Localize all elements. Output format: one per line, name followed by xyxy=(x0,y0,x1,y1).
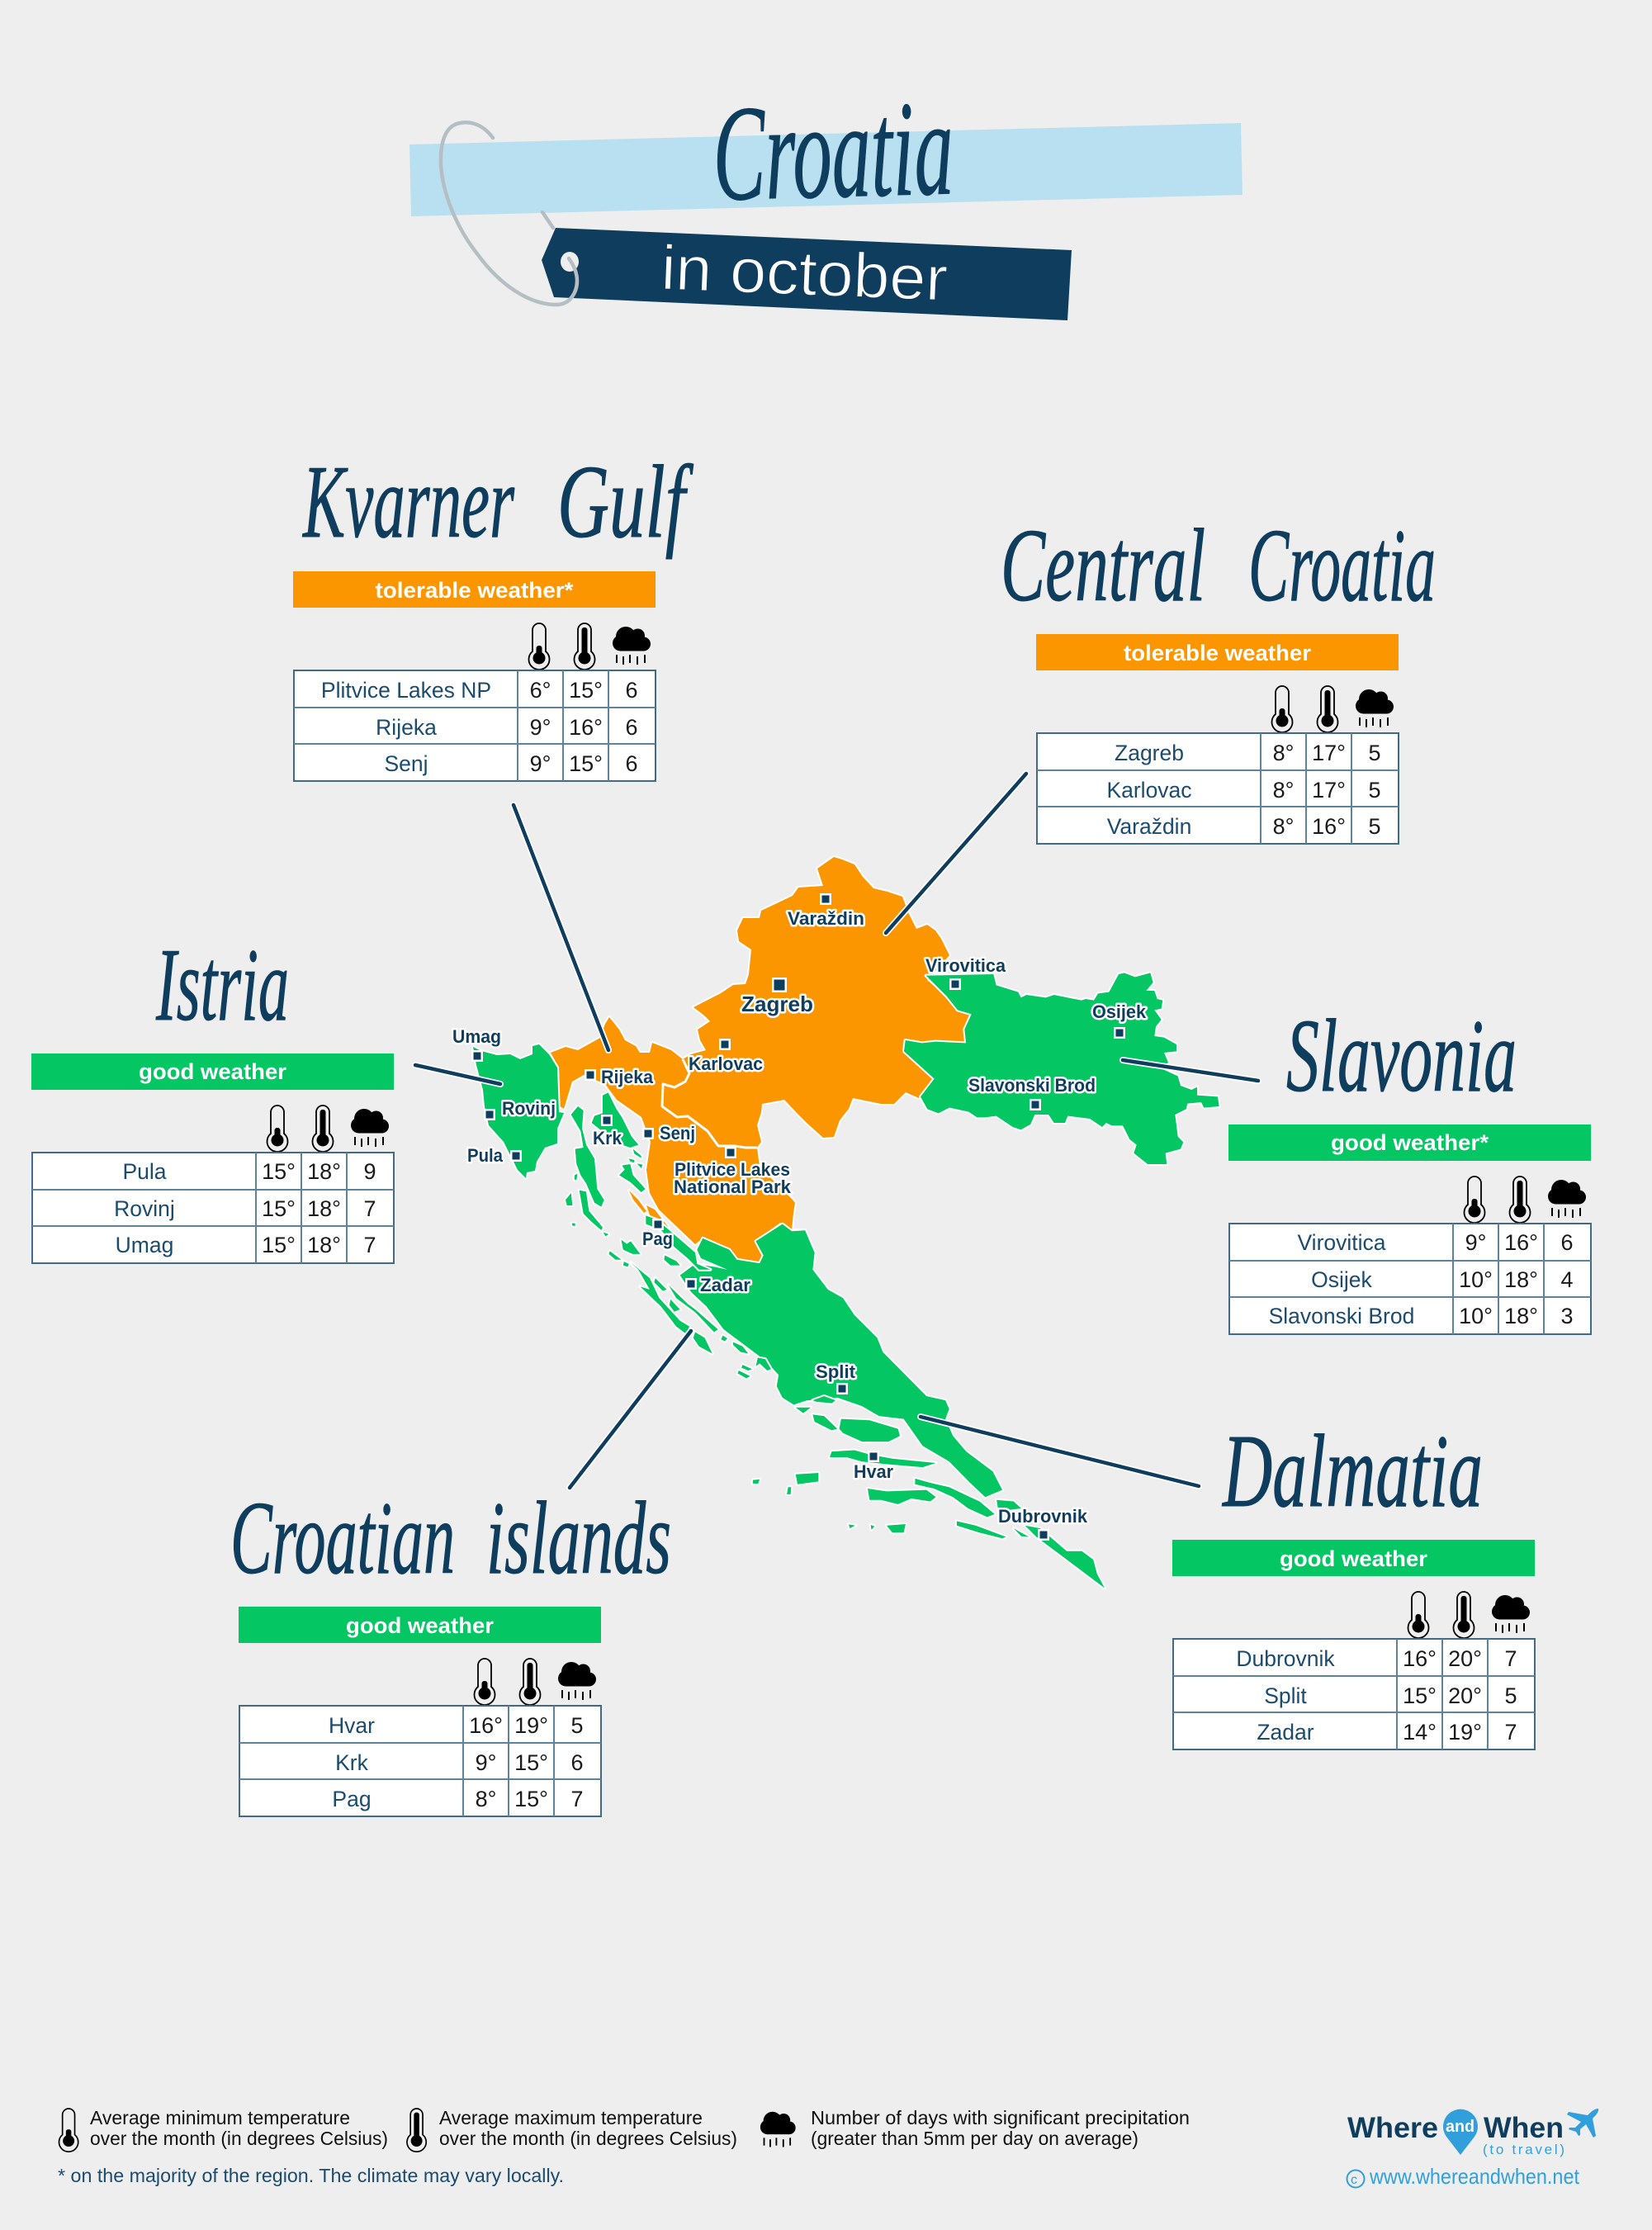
table: Dalmatia: 7 xyxy=(1504,1720,1517,1745)
leader: Central Croatia xyxy=(886,774,1026,933)
table: Slavonia: 10° xyxy=(1459,1267,1493,1292)
northern Adriatic islands xyxy=(566,1092,646,1236)
table: Istria: 15° xyxy=(262,1196,296,1221)
table: Dalmatia: 15° xyxy=(1403,1683,1437,1708)
legend text: minimum temperature xyxy=(90,2107,388,2149)
icon: airplane xyxy=(1567,2109,1598,2138)
map labels: Zadar xyxy=(700,1275,750,1295)
table: Kvarner Gulf: 6 xyxy=(625,715,638,740)
table: Central Croatia xyxy=(1036,634,1399,844)
legend text: precipitation: (greater than 5mm per day on average) xyxy=(811,2128,1138,2149)
table: Central Croatia: Varaždin xyxy=(1107,814,1191,839)
table: Kvarner Gulf: 6 xyxy=(625,678,638,703)
footnote: * on the majority of the region. The climate may vary locally. xyxy=(58,2165,564,2186)
heading: Central Croatia: Croatia xyxy=(1248,509,1436,623)
logo: Where and When xyxy=(1347,2109,1598,2189)
city markers xyxy=(474,895,1123,1539)
table: Dalmatia: 19° xyxy=(1448,1720,1482,1745)
map labels: Zagreb xyxy=(741,992,813,1016)
map labels: National Park xyxy=(674,1177,792,1197)
legend text: maximum temperature xyxy=(439,2107,737,2149)
region: Istria (green) xyxy=(473,1044,564,1178)
table: Slavonia: 3 xyxy=(1560,1304,1574,1328)
table: Croatian islands: 15° xyxy=(514,1787,548,1811)
table: Slavonia: 10° xyxy=(1459,1304,1493,1328)
boundary: Kvarner / Central Croatia xyxy=(662,1059,757,1148)
logo pin xyxy=(1443,2109,1478,2155)
table: Dalmatia: 20° xyxy=(1448,1683,1482,1708)
table: Kvarner Gulf: 6 xyxy=(625,751,638,776)
region: Central Croatia and Kvarner (orange) xyxy=(551,857,972,1263)
table: Dalmatia xyxy=(1172,1540,1535,1749)
legend text: minimum temperature: over the month (in degrees Celsius) xyxy=(90,2128,388,2149)
heading: Slavonia: Slavonia xyxy=(1286,999,1517,1114)
map labels: Varaždin xyxy=(788,908,864,929)
icon: maximum temperature xyxy=(407,2109,426,2152)
heading: Kvarner Gulf: Gulf xyxy=(557,445,693,560)
table: Slavonia xyxy=(1228,1124,1591,1334)
map labels: Krk xyxy=(593,1128,622,1148)
table: Kvarner Gulf: tolerable weather* xyxy=(375,578,574,603)
legend text: precipitation: Number of days with significant precipitation xyxy=(811,2107,1190,2128)
table: Dalmatia: 16° xyxy=(1403,1646,1437,1671)
table: Croatian islands: 8° xyxy=(476,1787,496,1811)
table: Dalmatia: 20° xyxy=(1448,1646,1482,1671)
table: Istria: 15° xyxy=(262,1233,296,1257)
table: Istria xyxy=(31,1053,394,1263)
table: Slavonia: Slavonski Brod xyxy=(1269,1304,1414,1328)
leader: Slavonia xyxy=(1123,1060,1258,1081)
table: Central Croatia: Karlovac xyxy=(1106,778,1192,803)
logo tagline: (to travel) xyxy=(1483,2142,1564,2157)
table: Croatian islands: 9° xyxy=(476,1750,496,1775)
heading: Dalmatia: Dalmatia xyxy=(1222,1414,1483,1529)
map labels: Karlovac xyxy=(689,1053,763,1074)
table: Dalmatia: Dubrovnik xyxy=(1236,1646,1335,1671)
region: Dalmatia and southern islands (green) xyxy=(608,1215,1105,1588)
table: Croatian islands: 5 xyxy=(570,1713,584,1738)
icon: precipitation xyxy=(760,2112,796,2147)
price tag xyxy=(542,228,1072,320)
table: Dalmatia: 7 xyxy=(1504,1646,1517,1671)
table: Kvarner Gulf: 15° xyxy=(569,751,603,776)
table: Croatian islands: 15° xyxy=(514,1750,548,1775)
table: Slavonia: 4 xyxy=(1560,1267,1574,1292)
map labels: Slavonski Brod xyxy=(968,1075,1096,1096)
panel: Kvarner Gulf xyxy=(293,445,693,781)
region: Slavonia (green) xyxy=(904,973,1219,1164)
panel: Dalmatia xyxy=(1172,1414,1535,1749)
table: Croatian islands: Hvar xyxy=(329,1713,375,1738)
table: Istria: 18° xyxy=(307,1196,341,1221)
legend text: maximum temperature: Average maximum temperature xyxy=(439,2107,703,2128)
table: Istria: Rovinj xyxy=(114,1196,175,1221)
table: Slavonia: 16° xyxy=(1504,1230,1538,1255)
table: Kvarner Gulf: 9° xyxy=(530,715,551,740)
logo wordmark: When xyxy=(1484,2112,1564,2144)
table: Kvarner Gulf: 9° xyxy=(530,751,551,776)
panel: Croatian islands xyxy=(230,1481,671,1816)
logo wordmark xyxy=(1347,2112,1564,2144)
table: Croatian islands: 6 xyxy=(570,1750,584,1775)
panel: Central Croatia xyxy=(1001,509,1436,844)
map labels: Split xyxy=(816,1361,856,1382)
logo wordmark: Where xyxy=(1347,2112,1438,2144)
table: Central Croatia: 17° xyxy=(1312,778,1346,803)
table: Dalmatia: Zadar xyxy=(1257,1720,1314,1745)
copyright and website: www.whereandwhen.net xyxy=(1369,2164,1580,2189)
map labels: Umag xyxy=(452,1026,501,1047)
table: Central Croatia: 5 xyxy=(1368,741,1381,765)
table: Istria: 18° xyxy=(307,1233,341,1257)
tag hole xyxy=(561,252,579,272)
heading: Kvarner Gulf: Kvarner xyxy=(302,445,515,560)
table: Slavonia: 18° xyxy=(1504,1304,1538,1328)
table: Istria: 18° xyxy=(307,1159,341,1184)
table: Central Croatia: 8° xyxy=(1273,778,1294,803)
table: Dalmatia: 14° xyxy=(1403,1720,1437,1745)
map labels: Pag xyxy=(642,1229,673,1249)
map labels: Hvar xyxy=(854,1461,893,1482)
logo pin text: and xyxy=(1446,2118,1474,2136)
table: Croatian islands: good weather xyxy=(346,1613,494,1638)
table: Croatian islands: Krk xyxy=(335,1750,369,1775)
table: Croatian islands: 16° xyxy=(469,1713,503,1738)
table: Central Croatia: 17° xyxy=(1312,741,1346,765)
table: Kvarner Gulf: Senj xyxy=(384,751,428,776)
map of Croatia xyxy=(473,857,1219,1588)
table: Kvarner Gulf: Plitvice Lakes NP xyxy=(321,678,491,703)
table: Istria: Umag xyxy=(116,1233,173,1257)
table: Istria: Pula xyxy=(122,1159,167,1184)
table: Kvarner Gulf xyxy=(293,571,656,781)
map labels: Rijeka xyxy=(601,1067,654,1087)
table: Dalmatia: Split xyxy=(1264,1683,1307,1708)
map labels: Plitvice Lakes xyxy=(675,1159,790,1180)
table: Croatian islands: 7 xyxy=(570,1787,584,1811)
table: Slavonia: 9° xyxy=(1465,1230,1486,1255)
copyright and website: c xyxy=(1351,2173,1357,2187)
leader: Croatian islands xyxy=(570,1331,691,1488)
legend text: minimum temperature: Average minimum temperature xyxy=(90,2107,350,2128)
table: Istria: 9 xyxy=(363,1159,376,1184)
table: Central Croatia: 5 xyxy=(1368,814,1381,839)
table: Kvarner Gulf: 16° xyxy=(569,715,603,740)
table: Kvarner Gulf: 15° xyxy=(569,678,603,703)
map labels: Osijek xyxy=(1092,1001,1147,1022)
table: Slavonia: 6 xyxy=(1560,1230,1574,1255)
table: Istria: 15° xyxy=(262,1159,296,1184)
heading: Central Croatia: Central xyxy=(1001,509,1205,623)
map labels: Pula xyxy=(467,1145,504,1166)
icon: minimum temperature xyxy=(59,2109,78,2152)
table: Istria: 7 xyxy=(363,1233,376,1257)
table: Central Croatia: tolerable weather xyxy=(1124,641,1312,665)
table: Slavonia: Virovitica xyxy=(1297,1230,1386,1255)
title block xyxy=(409,72,1243,320)
table: Dalmatia: good weather xyxy=(1280,1546,1427,1571)
table: Kvarner Gulf: Rijeka xyxy=(376,715,437,740)
legend xyxy=(58,2107,1190,2186)
table: Central Croatia: 8° xyxy=(1273,814,1294,839)
table: Slavonia: good weather* xyxy=(1331,1130,1489,1155)
title: Croatia: Croatia xyxy=(711,72,955,230)
orange island near Pag xyxy=(629,1191,646,1213)
table: Dalmatia: 5 xyxy=(1504,1683,1517,1708)
leader: Kvarner Gulf xyxy=(514,805,608,1050)
table: Croatian islands: Pag xyxy=(332,1787,372,1811)
heading: Croatian islands: Croatian xyxy=(230,1481,455,1596)
map labels: Senj xyxy=(660,1123,695,1143)
table: Croatian islands xyxy=(239,1607,601,1816)
legend text: maximum temperature: over the month (in degrees Celsius) xyxy=(439,2128,737,2149)
table: Central Croatia: 8° xyxy=(1273,741,1294,765)
panel: Slavonia xyxy=(1228,999,1591,1334)
subtitle: in october: in october xyxy=(660,233,949,315)
legend text: precipitation xyxy=(811,2107,1190,2149)
panel: Istria xyxy=(31,928,394,1263)
table: Slavonia: Osijek xyxy=(1311,1267,1373,1292)
map labels: Dubrovnik xyxy=(998,1506,1088,1527)
leader: Dalmatia xyxy=(921,1417,1199,1486)
table: Slavonia: 18° xyxy=(1504,1267,1538,1292)
map labels xyxy=(452,908,1147,1527)
table: Istria: 7 xyxy=(363,1196,376,1221)
heading: Croatian islands: islands xyxy=(486,1481,671,1596)
leader: Istria xyxy=(415,1065,500,1084)
tag string xyxy=(441,122,577,305)
map labels: Virovitica xyxy=(925,955,1006,976)
title band xyxy=(409,123,1243,216)
table: Croatian islands: 19° xyxy=(514,1713,548,1738)
map labels: Rovinj xyxy=(502,1098,556,1119)
heading: Istria: Istria xyxy=(155,928,289,1043)
table: Istria: good weather xyxy=(139,1059,286,1084)
table: Central Croatia: 16° xyxy=(1312,814,1346,839)
table: Central Croatia: Zagreb xyxy=(1115,741,1184,765)
table: Kvarner Gulf: 6° xyxy=(530,678,551,703)
leader lines xyxy=(415,774,1258,1488)
table: Central Croatia: 5 xyxy=(1368,778,1381,803)
